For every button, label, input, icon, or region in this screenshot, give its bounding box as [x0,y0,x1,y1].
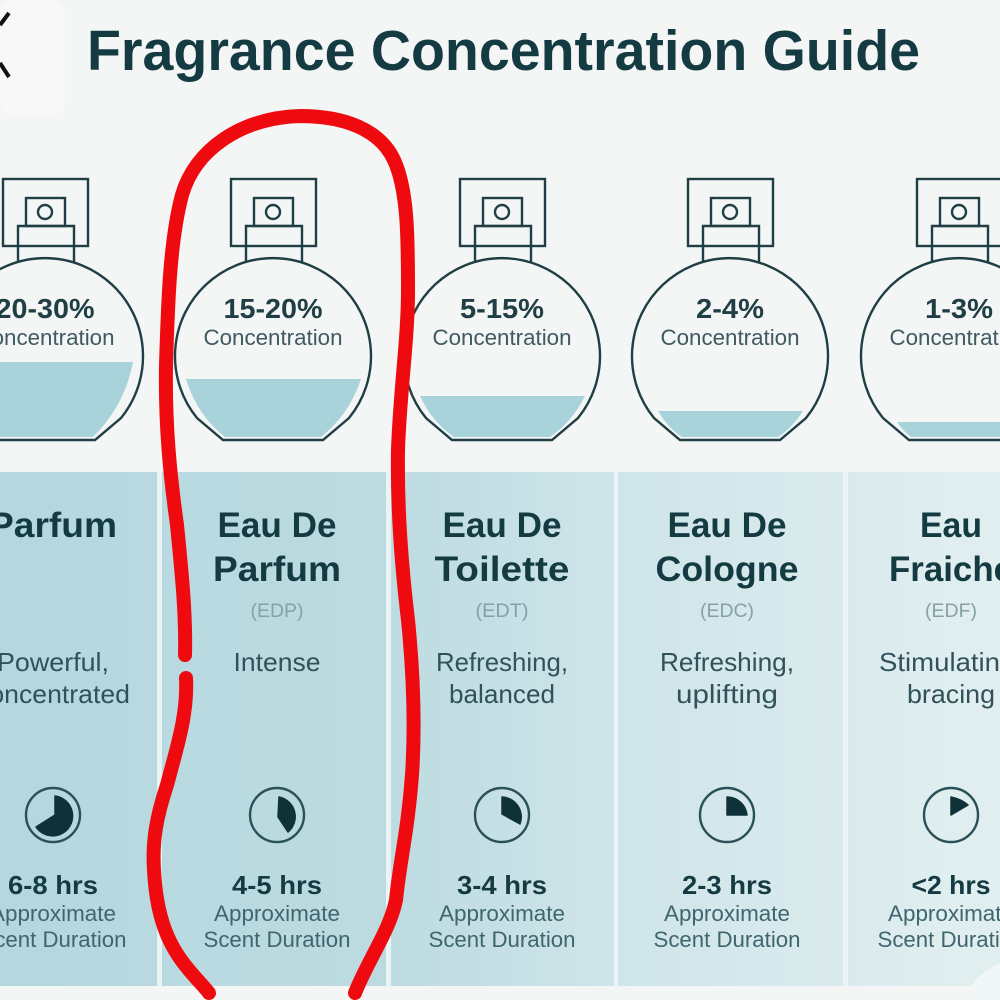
panel: Eau De Cologne [618,472,843,986]
EDP duration [204,870,350,952]
corner highlight [965,963,1000,1000]
bottle: Eau De Parfum 15-20% [175,179,371,440]
bottle: Eau De Cologne 2-4% [632,179,828,440]
Parfum description: Powerful, [0,647,109,677]
EDC code: (EDC) [700,601,754,622]
EDC duration: Approximate [664,901,790,926]
bottle: Eau De Parfum 15-20%: 15-20% [224,293,323,324]
EDF name [889,506,1000,589]
icon: duration 2-3 hrs [700,788,754,842]
EDT duration: 3-4 hrs [457,870,547,900]
icon: duration under 2 hrs [924,788,978,842]
bottle: Eau Fraiche 1-3%: 1-3% [925,293,993,324]
back button [0,0,65,115]
bottle: Eau De Parfum 15-20%: Concentration [204,325,342,350]
Parfum duration: 6-8 hrs [8,870,98,900]
EDP code: (EDP) [250,601,304,622]
EDC duration: 2-3 hrs [682,870,772,900]
bottle: Eau De Toilette 5-15% [404,179,600,440]
title: Fragrance Concentration Guide [87,19,920,83]
EDF description: bracing [907,679,995,709]
EDT description: Refreshing, [436,647,568,677]
EDT name [434,506,570,589]
EDT duration: Scent Duration [428,927,576,952]
EDF code: (EDF) [925,601,977,622]
bottle: Parfum 20-30% [0,179,143,440]
bottle: Eau De Toilette 5-15%: 5-15% [460,293,544,324]
EDP description: Intense [234,647,320,677]
EDF duration: <2 hrs [912,870,990,900]
EDC name [656,506,798,589]
EDC description: Refreshing, [660,647,794,677]
bottle: Eau De Toilette 5-15%: Concentration [432,325,572,350]
EDC duration: Scent Duration [654,927,800,952]
EDC name: Eau De [668,506,786,545]
Parfum duration [0,870,126,952]
icon: duration 6-8 hrs [26,788,80,842]
EDP name: Eau De [218,506,336,545]
EDP name: Parfum [213,550,341,589]
EDT duration: Approximate [439,901,565,926]
EDF description [879,647,1000,709]
bottle: Eau De Cologne 2-4%: Concentration [660,325,800,350]
panel: Eau De Parfum [162,472,386,986]
EDT description: balanced [449,679,555,709]
Parfum description [0,647,130,709]
EDP duration: Approximate [214,901,340,926]
panel: Eau Fraiche [848,472,1000,986]
EDT name: Toilette [434,550,570,589]
EDT name: Eau De [442,506,562,545]
bottle: Eau Fraiche 1-3% [861,179,1000,440]
EDP name [213,506,341,589]
EDC description [660,647,794,709]
hand-drawn red highlight around Eau De Parfum [154,116,414,993]
EDT description [436,647,568,709]
EDP duration: Scent Duration [204,927,350,952]
EDC duration [654,870,800,952]
icon: duration 4-5 hrs [250,788,304,842]
EDC description: uplifting [676,679,778,709]
EDT code: (EDT) [476,601,528,622]
panel: Parfum [0,472,157,986]
EDC name: Cologne [656,550,798,589]
EDT duration [428,870,576,952]
panel: Eau De Toilette [391,472,614,986]
bottle: Eau De Cologne 2-4%: 2-4% [696,293,764,324]
EDF duration [878,870,1000,952]
EDF name: Eau [920,506,982,545]
icon: duration 3-4 hrs [475,788,529,842]
EDP duration: 4-5 hrs [232,870,322,900]
